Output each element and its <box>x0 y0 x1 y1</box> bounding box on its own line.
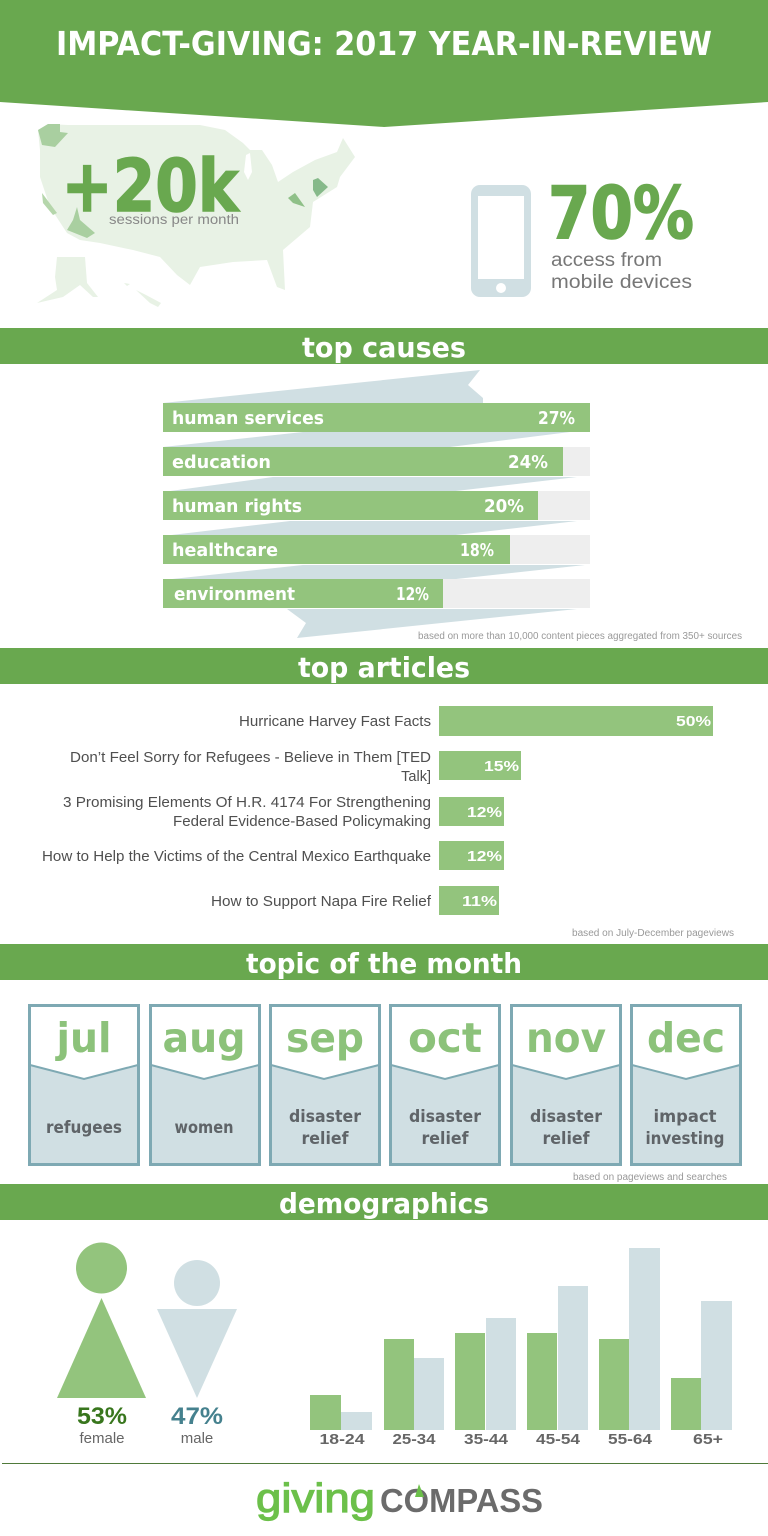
card: november <box>512 1006 620 1164</box>
card: july: jul <box>55 1014 112 1062</box>
group: 45-54 <box>527 1286 588 1448</box>
bar: human rights: 20% <box>484 496 524 517</box>
group: 25-34 <box>384 1339 444 1448</box>
source note: based on pageviews and searches <box>573 1172 727 1183</box>
group: 65+ <box>671 1301 732 1448</box>
bar: Napa fire <box>211 886 499 915</box>
logo: Giving Compass: COMPASS <box>380 1482 543 1519</box>
card: november: nov <box>526 1014 606 1062</box>
bar: Refugees TED talk <box>70 750 521 785</box>
source note: based on July-December pageviews <box>572 928 734 939</box>
group: 25-34: 25-34 <box>392 1431 436 1448</box>
heading: top articles: top articles <box>298 651 470 684</box>
group: 18-24: 18-24 <box>320 1431 365 1448</box>
bar: human services <box>163 403 590 432</box>
card: september <box>270 1006 380 1164</box>
bar: environment: 12% <box>396 584 429 605</box>
bar: Refugees TED talk: Talk] <box>401 769 431 785</box>
caption: mobile devices <box>551 272 692 293</box>
bar: Hurricane Harvey: 50% <box>676 713 711 730</box>
female share <box>77 1403 127 1447</box>
card: november: relief <box>542 1129 590 1149</box>
bar: Mexico earthquake: How to Help the Victims of the Central Mexico Earthquake <box>42 849 431 865</box>
panel: months <box>30 1006 740 1183</box>
bar: Hurricane Harvey: Hurricane Harvey Fast Facts <box>239 714 431 730</box>
bar: education: education <box>172 452 271 473</box>
bar: human services: 27% <box>538 408 575 429</box>
card: september: relief <box>302 1129 349 1149</box>
bar: education <box>163 447 590 476</box>
bar: H.R. 4174: 12% <box>467 804 502 821</box>
card: november: disaster <box>530 1107 603 1127</box>
card: october: oct <box>408 1014 482 1062</box>
male share <box>171 1403 223 1447</box>
bar: Hurricane Harvey <box>239 706 713 736</box>
card: august: aug <box>162 1014 246 1062</box>
panel: causes chart <box>163 370 742 642</box>
card: october <box>390 1006 500 1164</box>
caption: access from <box>551 250 662 271</box>
card: august: women <box>174 1118 234 1138</box>
bar: healthcare: 18% <box>460 540 494 561</box>
bar: environment: environment <box>174 584 295 605</box>
logo: Giving Compass <box>256 1475 543 1521</box>
heading: demographics: demographics <box>279 1187 489 1220</box>
big percent: 70% <box>548 171 694 255</box>
heading: top articles <box>0 648 768 684</box>
card: december: impact <box>654 1107 716 1127</box>
card: september: sep <box>286 1014 364 1062</box>
male share: male <box>181 1430 213 1447</box>
group: 65+: 65+ <box>693 1431 723 1448</box>
heading: demographics <box>0 1184 768 1220</box>
card: december <box>632 1006 740 1164</box>
group: 35-44: 35-44 <box>464 1431 509 1448</box>
bar: Mexico earthquake <box>42 841 504 870</box>
group: 55-64 <box>599 1248 660 1448</box>
card: december: investing <box>646 1129 724 1149</box>
bar: healthcare <box>163 535 590 564</box>
source note: based on more than 10,000 content pieces aggregated from 350+ sources <box>418 631 742 642</box>
bar: Napa fire: 11% <box>462 893 497 910</box>
bar: Mexico earthquake: 12% <box>467 848 502 865</box>
bar chart: age groups <box>310 1248 732 1448</box>
caption <box>551 250 692 293</box>
heading: topic of the month: topic of the month <box>246 947 522 980</box>
card: october: disaster <box>409 1107 482 1127</box>
group: 18-24 <box>310 1395 372 1448</box>
heading: top causes <box>0 328 768 364</box>
card: december: dec <box>647 1014 725 1062</box>
bar: Refugees TED talk: 15% <box>484 758 519 775</box>
bar: H.R. 4174 <box>63 795 504 830</box>
card: july <box>30 1006 138 1164</box>
big number: +20k <box>62 144 240 228</box>
map of the United States <box>37 124 355 307</box>
card: july: refugees <box>46 1118 122 1138</box>
bar: Napa fire: How to Support Napa Fire Relief <box>211 894 432 910</box>
header banner <box>0 0 768 127</box>
female share: female <box>79 1430 125 1447</box>
logo: Giving Compass: giving <box>256 1475 375 1521</box>
bar: healthcare: healthcare <box>172 540 278 561</box>
bar: human rights: human rights <box>172 496 302 517</box>
bar: H.R. 4174: Federal Evidence-Based Policymaking <box>173 814 431 830</box>
card: august <box>150 1006 260 1164</box>
panel: articles chart <box>42 706 734 939</box>
bar: environment <box>163 579 590 608</box>
bar: Refugees TED talk: Don’t Feel Sorry for Refugees - Believe in Them [TED <box>70 750 431 766</box>
group: 55-64: 55-64 <box>608 1431 653 1448</box>
icon: male figure <box>157 1260 237 1398</box>
card: october: relief <box>422 1129 469 1149</box>
bar: H.R. 4174: 3 Promising Elements Of H.R. 4174 For Strengthening <box>63 795 431 811</box>
panel: mobile access <box>471 171 694 297</box>
female share: 53% <box>77 1403 127 1430</box>
bar: human rights <box>163 491 590 520</box>
heading: top causes: top causes <box>302 331 466 364</box>
male share: 47% <box>171 1403 223 1430</box>
caption: sessions per month <box>109 212 239 227</box>
panel: gender <box>57 1242 237 1447</box>
title: IMPACT-GIVING: 2017 YEAR-IN-REVIEW <box>56 24 712 63</box>
ribbon <box>163 370 585 638</box>
bar: human services: human services <box>172 408 324 429</box>
group: 45-54: 45-54 <box>536 1431 581 1448</box>
icon: female figure <box>57 1242 146 1398</box>
icon: phone <box>471 185 531 297</box>
heading: topic of the month <box>0 944 768 980</box>
group: 35-44 <box>455 1318 516 1448</box>
bar: education: 24% <box>508 452 548 473</box>
card: september: disaster <box>289 1107 362 1127</box>
panel: sessions map <box>37 124 355 307</box>
